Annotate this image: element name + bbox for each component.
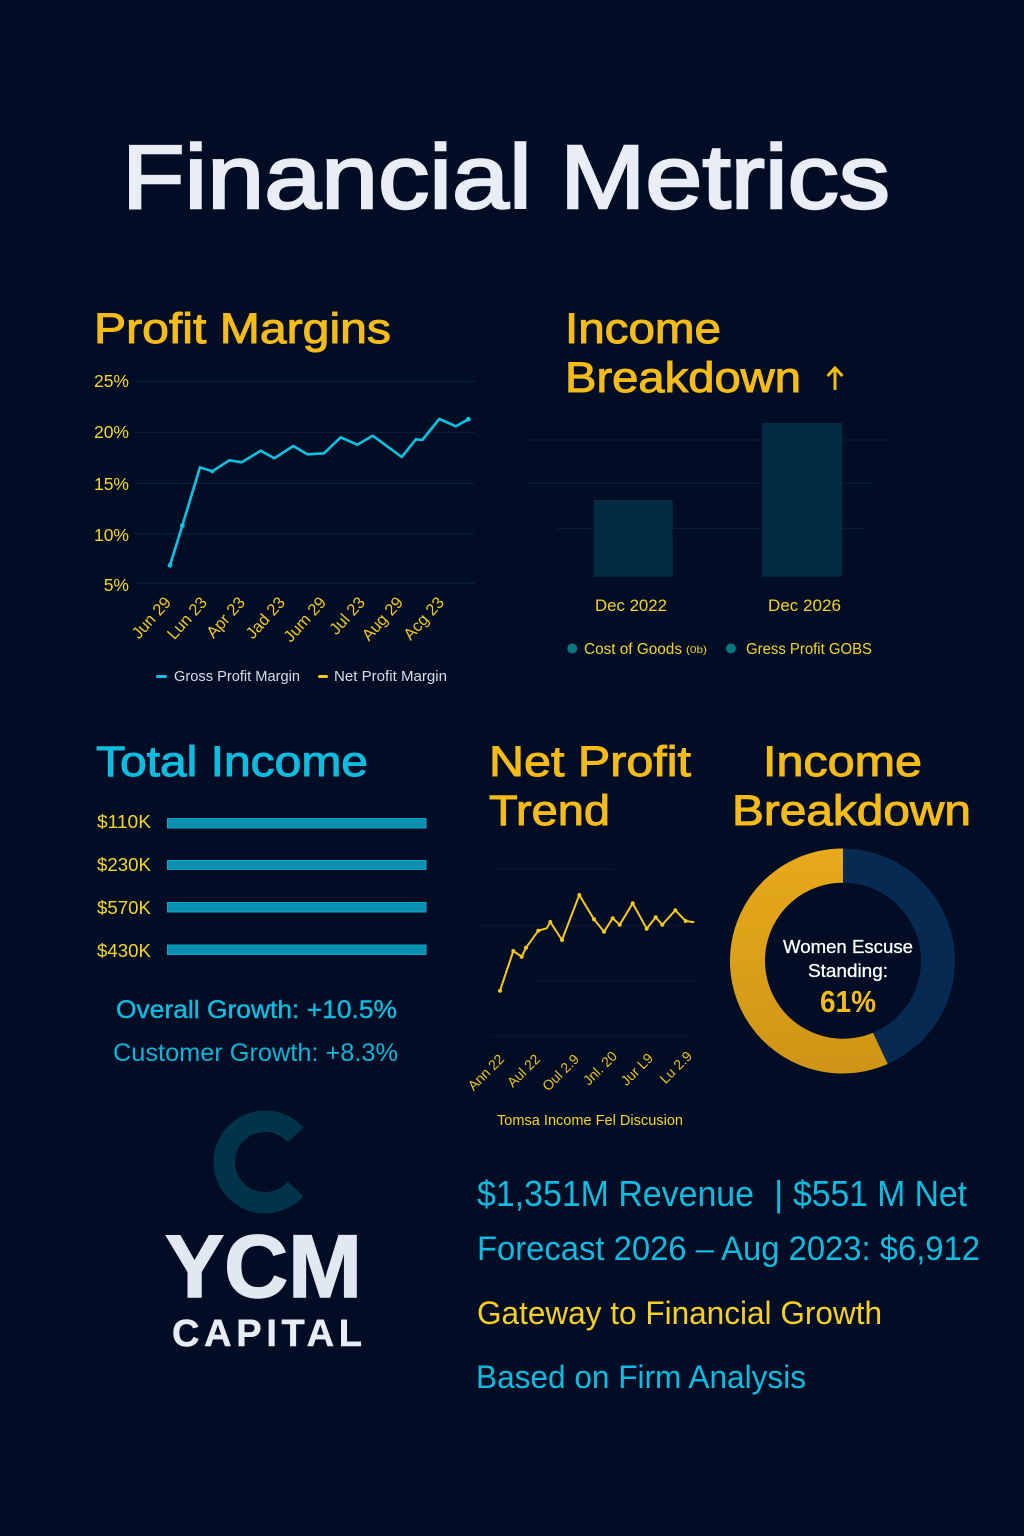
bar list: total income: $570K [97, 898, 151, 918]
legend: profit margins [156, 668, 447, 685]
panel: profit margins [94, 305, 475, 685]
panel: net profit trend [464, 738, 702, 1129]
legend: profit margins: Gross Profit Margin [174, 668, 300, 685]
bar chart: income breakdown: Dec 2026 [768, 597, 841, 615]
line chart: profit margins: Apr 23 [203, 594, 249, 642]
icon: up arrow [828, 368, 842, 390]
line chart: net profit trend: Lu 2.9 [656, 1048, 695, 1087]
legend: income breakdown [567, 641, 872, 658]
forecast: Forecast 2026 – Aug 2023: $6,912 [477, 1230, 980, 1268]
bar list: total income: $110K [97, 812, 151, 832]
line chart: profit margins: 10% [94, 525, 129, 545]
bar list: total income: $430K [97, 941, 151, 961]
line chart: profit margins [94, 371, 475, 646]
text block: key figures [476, 1173, 980, 1395]
heading: net profit trend: Trend [489, 787, 610, 835]
heading: total income: Total Income [96, 738, 368, 786]
heading: net profit trend [489, 738, 691, 835]
heading: profit margins: Profit Margins [94, 305, 391, 353]
heading: income breakdown: Breakdown [565, 354, 801, 402]
legend: income breakdown: (0b) [686, 645, 707, 656]
donut chart [730, 848, 955, 1073]
title: Financial Metrics [122, 128, 890, 228]
revenue and net [477, 1173, 967, 1214]
revenue and net: $1,351M Revenue [477, 1173, 754, 1214]
logo subtitle: CAPITAL [172, 1313, 362, 1355]
revenue and net: | [774, 1173, 783, 1214]
panel: total income [96, 738, 426, 1067]
heading: income breakdown: Income [565, 305, 721, 353]
source note: Based on Firm Analysis [476, 1359, 806, 1395]
panel: income breakdown donut [730, 738, 971, 1073]
line chart: profit margins: Jum 29 [280, 594, 330, 646]
donut chart: Standing: [808, 960, 888, 981]
heading: income breakdown: Breakdown [732, 787, 971, 835]
bar list: total income [97, 812, 426, 961]
line chart: profit margins: Acg 23 [400, 594, 448, 644]
line chart: profit margins: 15% [94, 474, 129, 494]
line chart: profit margins: 25% [94, 371, 129, 391]
heading: income breakdown: Income [763, 738, 922, 786]
tagline: Gateway to Financial Growth [477, 1295, 882, 1331]
line chart: net profit trend: Ann 22 [464, 1051, 507, 1093]
line chart: profit margins: 20% [94, 422, 129, 442]
stat: overall growth: Overall Growth: +10.5% [116, 996, 397, 1024]
line chart: net profit trend: Jur L9 [617, 1050, 656, 1089]
heading: income breakdown [732, 738, 971, 835]
heading: income breakdown [565, 305, 801, 402]
line chart: net profit trend [464, 869, 702, 1094]
donut chart: Women Escuse [783, 936, 913, 957]
line chart: profit margins: Lun 23 [164, 594, 211, 643]
line chart: profit margins: Jul 23 [326, 594, 369, 638]
revenue and net: $551 M Net [793, 1173, 967, 1214]
legend: profit margins: Net Profit Margin [334, 668, 447, 685]
logo: YCM Capital [165, 1110, 362, 1355]
line chart: net profit trend: Oul 2.9 [539, 1051, 582, 1094]
line chart: profit margins: 5% [104, 575, 129, 595]
bar chart: income breakdown: Dec 2022 [595, 597, 667, 615]
line chart: profit margins: Jad 23 [242, 594, 289, 642]
logo wordmark: YCM [165, 1216, 362, 1316]
caption: net profit trend: Tomsa Income Fel Discusion [497, 1113, 683, 1129]
stat: customer growth: Customer Growth: +8.3% [113, 1039, 398, 1067]
line chart: profit margins: Aug 29 [359, 594, 407, 645]
line chart: profit margins: Jun 29 [128, 594, 175, 642]
line chart: net profit trend: Jnl. 20 [580, 1048, 620, 1088]
panel: income breakdown bars [528, 305, 888, 658]
donut chart: 61% [820, 984, 876, 1019]
heading: net profit trend: Net Profit [489, 738, 691, 786]
line chart: net profit trend: Aul 22 [504, 1051, 543, 1090]
bar list: total income: $230K [97, 855, 151, 875]
icon: logo C mark [213, 1110, 304, 1214]
legend: income breakdown: Gress Profit GOBS [746, 641, 872, 658]
legend: income breakdown: Cost of Goods [584, 641, 682, 658]
bar chart: income breakdown [528, 423, 888, 615]
